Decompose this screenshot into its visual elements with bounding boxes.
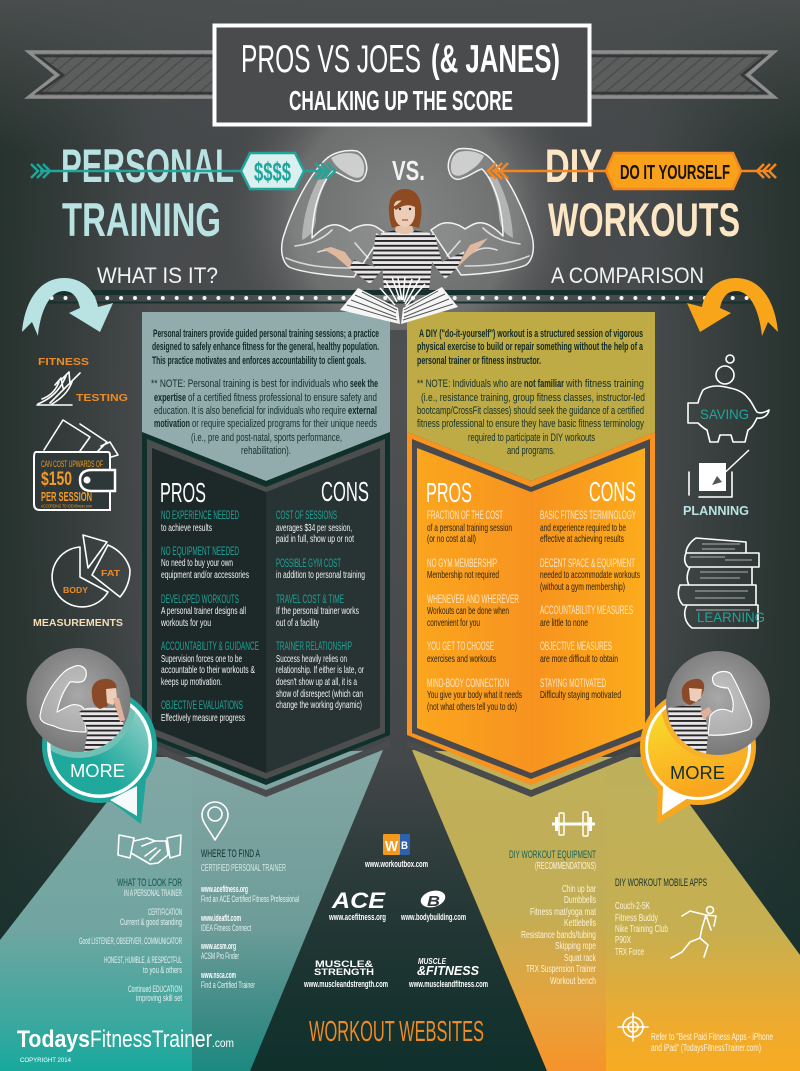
cons list: STAYING MOTIVATED	[540, 678, 606, 690]
logo: bodybuilding: B	[427, 893, 440, 910]
logo: workoutbox: www.workoutbox.com	[364, 859, 428, 869]
pros list: DEVELOPED WORKOUTS	[161, 594, 239, 606]
text: diy mobile apps: Fitness Buddy	[615, 913, 658, 924]
heading: personal training: PERSONAL	[61, 139, 234, 192]
panel: personal training intro	[142, 312, 390, 481]
bubble	[640, 698, 756, 824]
text: what to look for: Current & good standing	[120, 917, 182, 927]
panel: diy intro: personal trainer or fitness instructor.	[417, 355, 541, 367]
icon: body fat pie chart: BODY	[63, 585, 88, 595]
icon: target	[618, 1013, 648, 1041]
curved arrow teal	[22, 278, 113, 336]
more bubble orange with photo	[640, 646, 775, 824]
text: where to find a trainer: www.nsca.com	[200, 970, 236, 980]
pros list: to achieve results	[161, 522, 212, 534]
text: where to find a trainer: IDEA Fitness Connect	[201, 923, 251, 933]
text: where to find a trainer: www.acefitness.org	[200, 884, 248, 894]
logo: muscle and fitness: &FITNESS	[417, 963, 479, 978]
cons heading: CONS	[589, 476, 636, 507]
icon: wallet cost callout: PER SESSION	[41, 489, 92, 504]
cons list: are little to none	[540, 617, 588, 629]
text: diy mobile apps: TRX Force	[615, 947, 644, 958]
icon: fitness testing: FITNESS	[38, 357, 89, 368]
heading: diy workouts	[488, 139, 776, 246]
panel: diy intro: A DIY ("do-it-yourself") workout is a structured session of vigorous	[419, 328, 643, 340]
cons list: are more difficult to obtain	[540, 653, 618, 665]
icon: dumbbell	[552, 812, 595, 836]
text: what to look for: to you & others	[143, 965, 182, 975]
text: refer to paid apps	[651, 1032, 773, 1054]
chalk arms	[282, 148, 533, 277]
photo	[26, 648, 130, 752]
panel: diy intro: fitness professional to ensure they have basic fitness terminology	[417, 418, 644, 430]
pros list: (not what others tell you to do)	[427, 701, 517, 713]
icon: map pin	[202, 802, 228, 840]
panel: diy intro: not familiar	[524, 378, 564, 390]
logo: bodybuilding	[400, 888, 466, 922]
heading: diy workouts: DIY	[545, 139, 602, 192]
pros list: WHENEVER AND WHEREVER	[427, 594, 519, 606]
pros list: Membership not required	[427, 569, 499, 581]
icon: wallet cost callout	[34, 420, 118, 510]
pros list: Workouts can be done when	[427, 605, 509, 617]
ribbon behind title	[29, 52, 774, 97]
pros list: NO GYM MEMBERSHIP	[427, 558, 497, 570]
cons list: and experience required to be	[540, 522, 626, 534]
icon: body fat pie chart	[33, 535, 130, 629]
panel: personal training intro: external	[348, 405, 377, 417]
bubble: MORE	[70, 761, 125, 781]
icon: piggy bank saving: SAVING	[700, 406, 749, 422]
cons list: relationship. If either is late, or	[276, 664, 364, 676]
text: diy equipment: Squat rack	[564, 953, 597, 964]
pros list: exercises and workouts	[427, 653, 496, 665]
curved arrow orange	[687, 278, 778, 336]
text: diy equipment: TRX Suspension Trainer	[526, 964, 596, 975]
cons list: COST OF SESSIONS	[276, 510, 337, 522]
text: what to look for: IN A PERSONAL TRAINER	[124, 888, 182, 898]
logo: workoutbox: W	[385, 838, 399, 855]
pros list: YOU GET TO CHOOSE	[427, 641, 494, 653]
title box	[214, 26, 590, 124]
text: where to find a trainer: ACSM Pro Finder	[201, 951, 239, 961]
heading: personal training	[31, 139, 335, 246]
pros list: equipment and/or accessories	[161, 569, 249, 581]
panel: personal training intro: motivation	[154, 418, 190, 430]
panel: diy intro: with fitness training	[565, 378, 644, 390]
logo: muscle and fitness	[408, 957, 488, 989]
logo: muscle and strength: MUSCLE&	[315, 959, 374, 969]
text: what to look for: improving skill set	[136, 993, 182, 1003]
icon: wallet cost callout: ACCORDING TO IDEAfitness.com	[41, 504, 92, 508]
cons list: OBJECTIVE MEASURES	[540, 641, 612, 653]
pros list: accountable to their workouts &	[161, 664, 255, 676]
icon: fitness testing: TESTING	[76, 393, 128, 404]
brand: todays fitness trainer: FitnessTrainer	[90, 1026, 212, 1053]
icon: planning: PLANNING	[683, 503, 749, 518]
dotted divider band	[48, 290, 754, 304]
cons list: paid in full, show up or not	[276, 533, 354, 545]
pros list: Effectively measure progress	[161, 712, 245, 724]
text: diy mobile apps: P90X	[615, 935, 631, 946]
text: diy equipment: Chin up bar	[562, 884, 596, 895]
text: where to find a trainer: CERTIFIED PERSONAL TRAINER	[201, 863, 286, 874]
logo: muscle and fitness: www.muscleandfitness.com	[408, 979, 488, 989]
panel: diy intro: ** NOTE: Individuals who are	[417, 378, 522, 390]
cons list: doesn't show up at all, it is a	[276, 676, 357, 688]
text: diy mobile apps: DIY WORKOUT MOBILE APPS	[615, 877, 707, 889]
pros list: NO EQUIPMENT NEEDED	[161, 546, 239, 558]
cons list: BASIC FITNESS TERMINOLOGY	[540, 510, 636, 522]
cons list: DECENT SPACE & EQUIPMENT	[540, 558, 635, 570]
text: where to find a trainer: WHERE TO FIND A	[201, 848, 260, 860]
cons list: Difficulty staying motivated	[540, 689, 621, 701]
pros list: A personal trainer designs all	[161, 605, 246, 617]
text: where to find a trainer: www.acsm.org	[200, 941, 236, 951]
text: what to look for: WHAT TO LOOK FOR	[117, 877, 182, 889]
panel: personal training intro: seek the	[350, 378, 378, 390]
woman shrugging	[323, 189, 488, 290]
icon: stack of books	[678, 538, 765, 628]
cons list: change the working dynamic)	[276, 699, 362, 711]
logo: ace	[328, 888, 387, 922]
panel: personal training intro: rehabilitation).	[241, 445, 291, 457]
text: diy equipment: Skipping rope	[555, 941, 596, 952]
text: diy mobile apps: Nike Training Club	[615, 924, 668, 935]
pros heading: PROS	[160, 477, 206, 508]
panel: diy intro: physical exercise to build or repair something without the help of a	[417, 341, 644, 353]
heading: workout websites: WORKOUT WEBSITES	[309, 1016, 484, 1048]
pros heading: PROS	[426, 477, 472, 508]
icon: wallet cost callout: $150	[41, 469, 72, 490]
panel: personal training intro: Personal trainers provide guided personal training sessions; a practice	[153, 328, 379, 340]
heading: personal training: $$$$	[254, 157, 291, 187]
panel: personal training intro: This practice motivates and enforces accountability to client goals.	[152, 355, 366, 367]
panel: personal training intro: or require specialized programs for their unique needs	[192, 418, 377, 430]
vs label: VS.	[392, 155, 425, 186]
text: diy equipment: Resistance bands/tubing	[521, 930, 596, 941]
panel: personal training intro: (i.e., pre and post-natal, sports performance,	[191, 432, 342, 444]
pros list: No need to buy your own	[161, 557, 233, 569]
logo: bodybuilding: www.bodybuilding.com	[400, 912, 466, 922]
cons list: TRAVEL COST & TIME	[276, 594, 344, 606]
more bubble teal with photo	[22, 644, 157, 824]
bubble: MORE	[670, 763, 725, 783]
icon: body fat pie chart: MEASUREMENTS	[33, 618, 123, 629]
logo: muscle and strength: www.muscleandstrength.com	[303, 979, 388, 989]
logo: ace: www.acefitness.org	[328, 912, 386, 922]
panel: diy pros and cons	[407, 432, 655, 797]
open book	[340, 277, 458, 324]
logo: muscle and fitness: MUSCLE	[418, 957, 447, 966]
text: diy equipment: Dumbbells	[564, 895, 596, 906]
pros list: MIND-BODY CONNECTION	[427, 678, 509, 690]
orange spotlight	[412, 750, 800, 1071]
panel: personal training intro: ** NOTE: Personal training is best for individuals who	[151, 378, 348, 390]
heading: personal training: TRAINING	[62, 193, 221, 246]
icon: stack of books: LEARNING	[697, 609, 765, 625]
cons list: needed to accommodate workouts	[540, 569, 640, 581]
pros list: NO EXPERIENCE NEEDED	[161, 510, 239, 522]
bubble	[42, 697, 157, 824]
panel: diy intro: (i.e., resistance training, group fitness classes, instructor-led	[421, 392, 645, 404]
pros list: OBJECTIVE EVALUATIONS	[161, 700, 243, 712]
icon: fitness testing	[37, 357, 128, 405]
cons list: If the personal trainer works	[276, 605, 359, 617]
panel: diy intro: bootcamp/CrossFit classes) should seek the guidance of a certified	[417, 405, 644, 417]
text: where to find a trainer: Find an ACE Certified Fitness Professional	[201, 894, 299, 904]
cons list: TRAINER RELATIONSHIP	[276, 641, 352, 653]
logo: workoutbox: B	[401, 840, 408, 852]
brand: todays fitness trainer: COPYRIGHT 2014	[20, 1058, 72, 1064]
logo: muscle and strength: STRENGTH	[314, 967, 374, 977]
panel: personal training intro: expertise	[154, 392, 186, 404]
pros list: (or no cost at all)	[427, 533, 476, 545]
text: diy equipment: DIY WORKOUT EQUIPMENT	[509, 849, 596, 861]
panel: diy intro: and programs.	[507, 445, 555, 457]
logo: muscle and strength	[303, 959, 388, 989]
logo: workoutbox	[364, 834, 428, 869]
text: diy equipment: Workout bench	[550, 976, 596, 987]
icon: planning	[683, 450, 749, 518]
panel: personal training intro: of a certified fitness professional to ensure safety and	[188, 392, 377, 404]
text: where to find a trainer: www.ideafit.com	[200, 913, 241, 923]
pros list: of a personal training session	[427, 522, 512, 534]
pros list: convenient for you	[427, 617, 480, 629]
text: what to look for: Good LISTENER, OBSERVER, COMMUNICATOR	[79, 936, 182, 946]
cons list	[276, 510, 365, 711]
teal spotlight	[0, 750, 383, 1071]
pros list	[427, 510, 522, 713]
photo	[666, 651, 770, 755]
text: what to look for	[79, 877, 182, 1003]
text: what to look for: CERTIFICATION	[148, 907, 182, 917]
panel: diy intro	[407, 312, 655, 481]
panel: personal training intro: designed to safely enhance fitness for the general, healthy population.	[152, 341, 379, 353]
cons list: Success heavily relies on	[276, 653, 347, 665]
pros list: ACCOUNTABILITY & GUIDANCE	[161, 641, 259, 653]
text: diy equipment: Fitness mat/yoga mat	[530, 907, 596, 918]
icon: piggy bank saving	[688, 355, 769, 442]
text: diy mobile apps	[615, 877, 707, 958]
panel: diy intro: required to participate in DIY workouts	[468, 432, 595, 444]
text: what to look for: Continued EDUCATION	[128, 984, 182, 994]
heading: diy workouts: DO IT YOURSELF	[620, 162, 730, 184]
pros list: Supervision forces one to be	[161, 653, 242, 665]
text: what to look for: HONEST, HUMBLE, & RESPECTFUL	[104, 955, 182, 965]
cons list: POSSIBLE GYM COST	[276, 558, 341, 570]
what is it: WHAT IS IT?	[97, 263, 218, 288]
pros list: keeps up motivation.	[161, 676, 222, 688]
icon: wallet cost callout: CAN COST UPWARDS OF	[41, 459, 103, 469]
logo: ace: ACE	[331, 888, 387, 913]
brand: todays fitness trainer	[17, 1026, 234, 1064]
panel: personal training pros and cons	[142, 432, 390, 797]
cons heading: CONS	[321, 476, 369, 507]
pros list	[160, 510, 259, 724]
text: diy equipment: Kettlebells	[564, 918, 596, 929]
brand: todays fitness trainer: Todays	[17, 1026, 90, 1053]
pros list: FRACTION OF THE COST	[427, 510, 503, 522]
title box: CHALKING UP THE SCORE	[289, 85, 513, 116]
cons list: show of disrespect (which can	[276, 688, 363, 700]
cons list: averages $34 per session,	[276, 522, 352, 534]
text: diy mobile apps: Couch-2-5K	[615, 901, 650, 912]
cons list	[540, 510, 640, 701]
text: where to find a trainer	[200, 848, 299, 990]
cons list: effective at achieving results	[540, 533, 624, 545]
brand: todays fitness trainer: .com	[212, 1036, 234, 1050]
cons list: (without a gym membership)	[540, 581, 625, 593]
text: diy equipment	[509, 849, 597, 987]
title box: (& JANES)	[431, 38, 560, 81]
panel: personal training intro: education. It is also beneficial for individuals who require	[154, 405, 346, 417]
icon: body fat pie chart: FAT	[101, 568, 121, 578]
pros list: workouts for you	[160, 617, 211, 629]
cons list: in addition to personal training	[276, 569, 365, 581]
text: diy equipment: (RECOMMENDATIONS)	[535, 861, 596, 872]
a comparison: A COMPARISON	[551, 263, 704, 288]
cons list: ACCOUNTABILITY MEASURES	[540, 605, 633, 617]
icon: runner	[671, 906, 716, 958]
cons list: out of a facility	[276, 617, 319, 629]
icon: handshake	[118, 835, 181, 864]
title box: PROS VS JOES	[241, 38, 421, 81]
text: where to find a trainer: Find a Certified Trainer	[201, 980, 255, 990]
pros list: You give your body what it needs	[427, 689, 522, 701]
